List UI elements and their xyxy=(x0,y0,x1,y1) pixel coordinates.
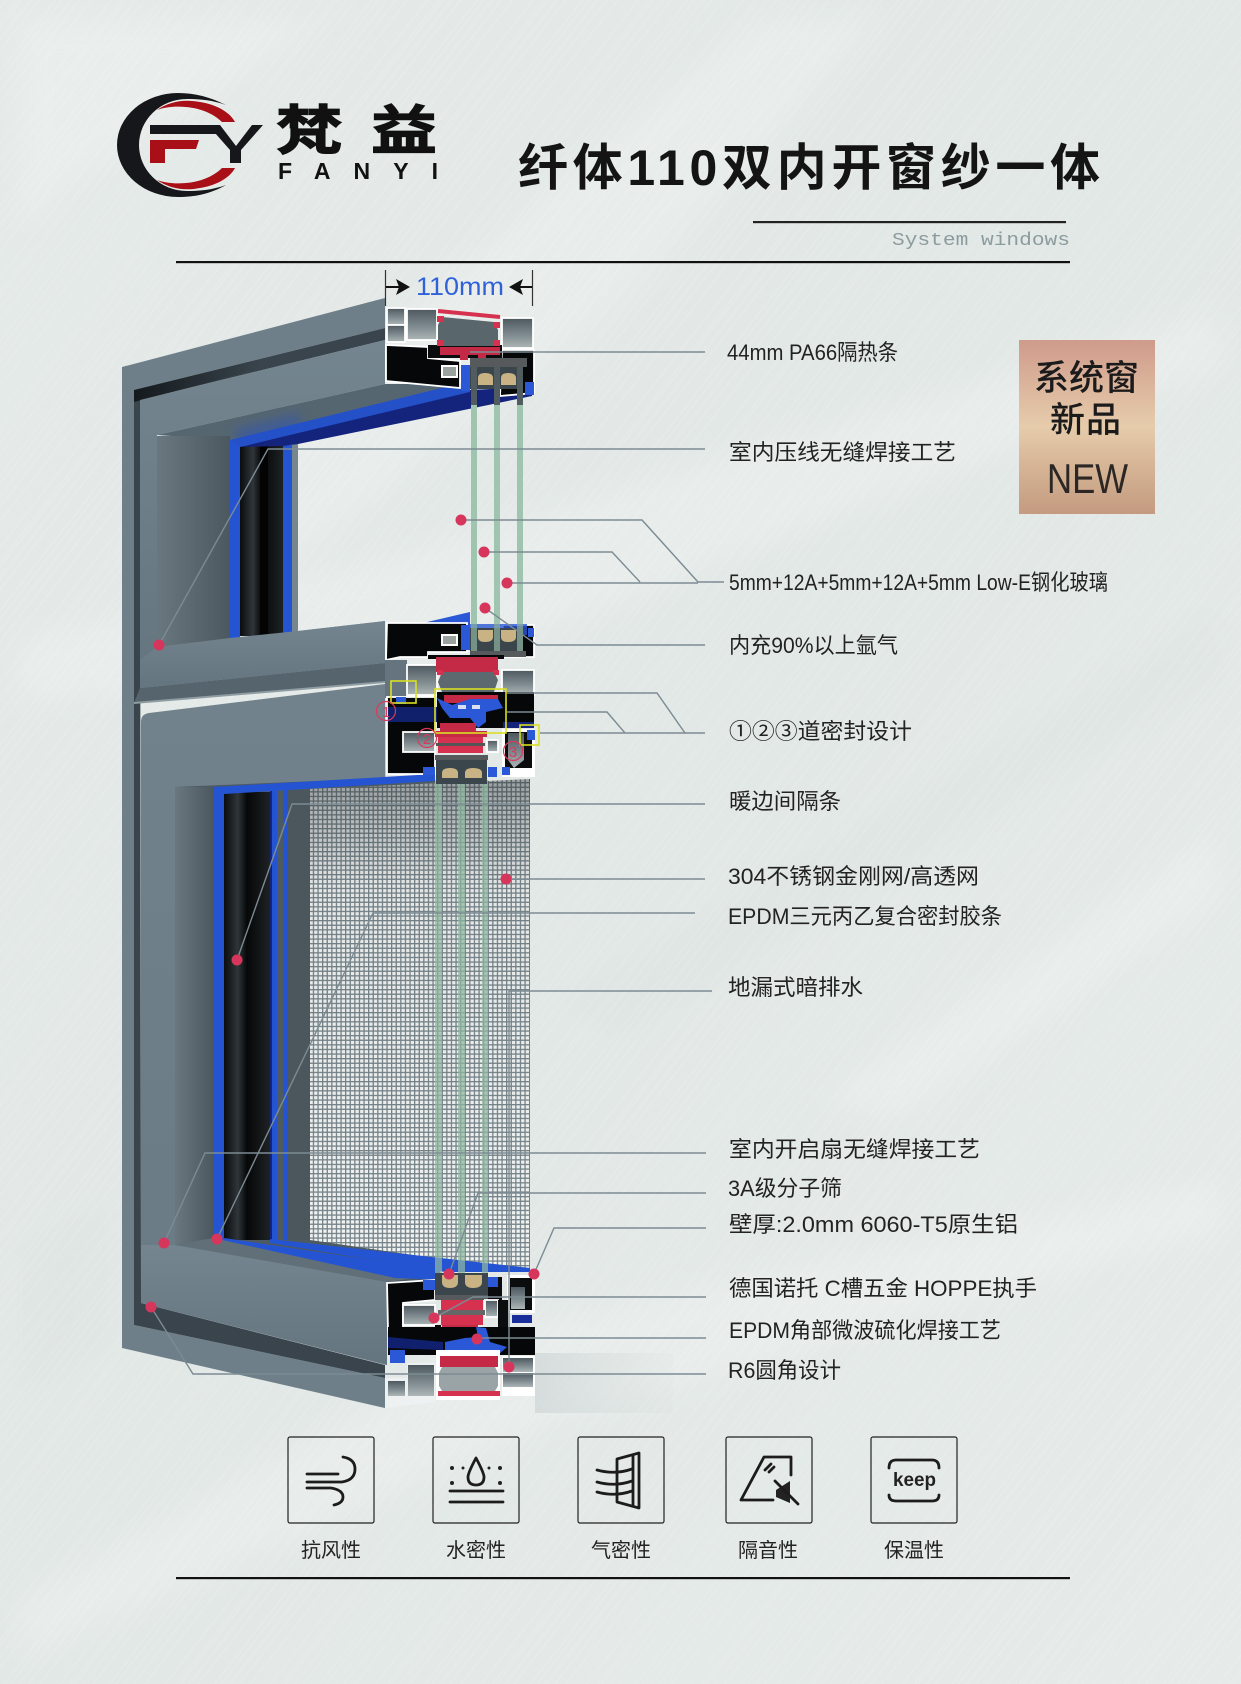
callout: glass specification: 5mm+12A+5mm+12A+5mm Low-E钢化玻璃 xyxy=(729,570,1108,595)
profile: top frame section xyxy=(386,308,534,405)
feature: 抗风性 xyxy=(288,1437,374,1562)
callout: 壁厚 xyxy=(528,1212,1018,1280)
callout: 室内开启扇无缝焊接工艺 xyxy=(158,1137,980,1248)
icon: muted window xyxy=(726,1437,812,1523)
badge: 系统窗新品 NEW: 新品 xyxy=(1050,401,1121,440)
logo: FANYI xyxy=(117,93,438,197)
seal markers ①②③: 2 xyxy=(423,731,431,748)
feature: 保温性: 保温性 xyxy=(884,1539,944,1562)
feature: 气密性: 气密性 xyxy=(591,1539,651,1562)
feature: 抗风性: 抗风性 xyxy=(301,1539,361,1562)
icon: water drop xyxy=(433,1437,519,1523)
callout: 德国诺托 C槽五金 HOPPE执手: 德国诺托 C槽五金 HOPPE执手 xyxy=(729,1276,1037,1301)
badge: 系统窗新品 NEW: NEW xyxy=(1047,455,1128,502)
dimension: 110mm xyxy=(386,270,532,306)
icon: wind xyxy=(288,1437,374,1523)
callout: 壁厚: 壁厚:2.0mm 6060-T5原生铝 xyxy=(729,1212,1018,1237)
feature: 气密性 xyxy=(578,1437,664,1562)
callout: 304不锈钢金刚网/高透网: 304不锈钢金刚网/高透网 xyxy=(728,864,979,889)
profile: bottom section xyxy=(385,1273,535,1408)
subtitle: System windows with rule: System windows xyxy=(892,231,1070,251)
logo mark: FY ring xyxy=(117,93,263,197)
bottom rule xyxy=(176,1577,1070,1579)
feature: 隔音性 xyxy=(726,1437,812,1562)
callout: 室内压线无缝焊接工艺: 室内压线无缝焊接工艺 xyxy=(729,440,956,465)
callout: 地漏式暗排水: 地漏式暗排水 xyxy=(728,975,863,1000)
callout: EPDM三元丙乙复合密封胶条 xyxy=(212,904,1002,1244)
callout: EPDM三元丙乙复合密封胶条: EPDM三元丙乙复合密封胶条 xyxy=(728,904,1002,929)
dimension: 110mm: 110mm xyxy=(416,273,504,301)
callout: 3A级分子筛 xyxy=(444,1176,842,1280)
callout: ①②③道密封设计 xyxy=(507,693,912,744)
icon: keep: keep xyxy=(893,1470,936,1491)
callout: EPDM角部微波硫化焊接工艺 xyxy=(472,1318,1001,1344)
floor shadow xyxy=(535,1353,673,1413)
callout: 暖边间隔条: 暖边间隔条 xyxy=(729,789,841,814)
insect screen mesh xyxy=(310,779,530,1272)
upper sash xyxy=(140,340,532,688)
logo text: FANYI: FANYI xyxy=(278,158,438,184)
callout: 暖边间隔条 xyxy=(232,789,841,966)
lower sash xyxy=(141,684,435,1365)
callout: 德国诺托 C槽五金 HOPPE执手 xyxy=(428,1276,1037,1324)
lower sill xyxy=(141,1238,530,1365)
top rule xyxy=(176,261,1070,263)
seal markers ①②③: 1 xyxy=(382,704,390,721)
callout: 3A级分子筛: 3A级分子筛 xyxy=(728,1176,842,1201)
callout: 内充90%以上氩气 xyxy=(480,602,898,658)
feature: 水密性 xyxy=(433,1437,519,1562)
glass panes xyxy=(435,390,523,1275)
seal markers ①②③ xyxy=(376,702,522,761)
feature: 水密性: 水密性 xyxy=(446,1539,506,1562)
callout: ①②③道密封设计: ①②③道密封设计 xyxy=(729,719,912,744)
callout: R6圆角设计 xyxy=(146,1302,841,1383)
logo text: 梵益: 梵益 xyxy=(276,101,437,160)
transom rail xyxy=(134,663,385,704)
callout: R6圆角设计: R6圆角设计 xyxy=(728,1358,841,1383)
title: 纤体110双内开窗纱一体 xyxy=(518,140,1100,196)
badge: 系统窗新品 NEW: 系统窗 xyxy=(1034,359,1139,398)
window cross-section illustration xyxy=(122,298,673,1413)
callout: 304不锈钢金刚网/高透网 xyxy=(500,864,979,889)
icon: air barrier xyxy=(578,1437,664,1523)
feature: 隔音性: 隔音性 xyxy=(738,1539,798,1562)
callout: 室内开启扇无缝焊接工艺: 室内开启扇无缝焊接工艺 xyxy=(729,1137,980,1162)
callout: 室内压线无缝焊接工艺 xyxy=(154,440,956,650)
badge: 系统窗新品 NEW xyxy=(1019,340,1155,514)
callout: 地漏式暗排水 xyxy=(504,975,863,1372)
seal highlights: yellow boxes xyxy=(391,681,539,745)
callout: 内充90%以上氩气: 内充90%以上氩气 xyxy=(729,633,898,658)
feature: 保温性 xyxy=(871,1437,957,1562)
callout: glass specification xyxy=(456,514,1108,595)
profile: middle section xyxy=(385,612,535,784)
seal markers ①②③: 3 xyxy=(509,744,517,761)
outer frame xyxy=(122,298,385,1408)
callout: 44mm PA66隔热条: 44mm PA66隔热条 xyxy=(727,340,898,365)
callout: EPDM角部微波硫化焊接工艺: EPDM角部微波硫化焊接工艺 xyxy=(729,1318,1001,1343)
